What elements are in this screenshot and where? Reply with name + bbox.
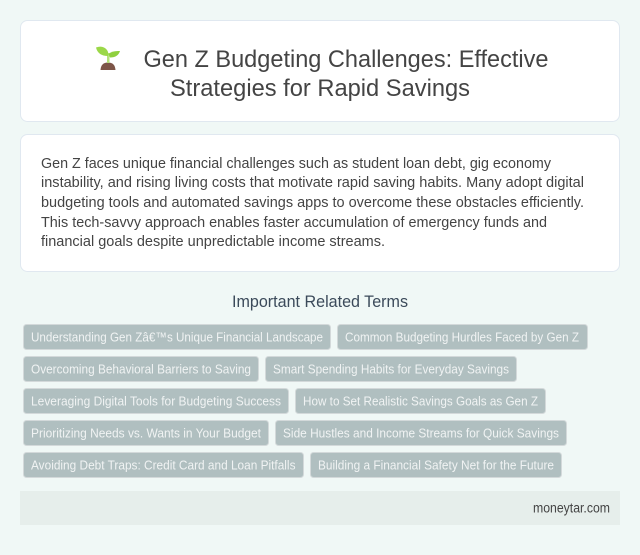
title: Gen Z Budgeting Challenges: Effective bbox=[144, 46, 548, 73]
tag: Overcoming Behavioral Barriers to Saving bbox=[31, 362, 251, 376]
tag bbox=[24, 356, 258, 382]
tag: Prioritizing Needs vs. Wants in Your Budget bbox=[31, 426, 261, 440]
tag bbox=[24, 452, 304, 478]
tag bbox=[338, 324, 588, 350]
text block: summary: budgeting tools and automated savings apps to overcome these obstacles efficiently. bbox=[41, 194, 584, 211]
text block: summary: This tech-savvy approach enables faster accumulation of emergency funds and bbox=[41, 214, 547, 231]
tag: Common Budgeting Hurdles Faced by Gen Z bbox=[345, 330, 579, 344]
tag: Understanding Gen Zâ€™s Unique Financial Landscape bbox=[31, 330, 323, 344]
tag: Leveraging Digital Tools for Budgeting Success bbox=[31, 394, 281, 408]
text block: summary: instability, and rising living costs that motivate rapid saving habits. Many adopt digital bbox=[41, 174, 584, 191]
tag bbox=[276, 420, 566, 446]
tag bbox=[310, 452, 562, 478]
tag: Smart Spending Habits for Everyday Savings bbox=[273, 362, 509, 376]
tag list bbox=[24, 324, 588, 478]
text block: summary: financial goals despite unpredictable income streams. bbox=[41, 233, 385, 250]
tag: Building a Financial Safety Net for the Future bbox=[318, 458, 554, 472]
tag bbox=[296, 388, 546, 414]
text block: summary: Gen Z faces unique financial challenges such as student loan debt, gig economy bbox=[41, 155, 551, 172]
tag: Avoiding Debt Traps: Credit Card and Loan Pitfalls bbox=[31, 458, 296, 472]
heading: related terms: Important Related Terms bbox=[232, 293, 408, 311]
tag bbox=[24, 388, 288, 414]
title: Strategies for Rapid Savings bbox=[170, 75, 470, 102]
panel: summary paragraph bbox=[20, 134, 620, 272]
footer bbox=[20, 491, 620, 525]
tag bbox=[24, 324, 330, 350]
icon: sprout bbox=[96, 47, 120, 70]
tag: Side Hustles and Income Streams for Quick Savings bbox=[283, 426, 559, 440]
panel: header card bbox=[20, 20, 620, 122]
tag: How to Set Realistic Savings Goals as Gen Z bbox=[303, 394, 538, 408]
footer: moneytar.com bbox=[533, 500, 610, 516]
text block: summary bbox=[41, 155, 584, 250]
title bbox=[144, 46, 548, 102]
tag bbox=[24, 420, 268, 446]
tag bbox=[266, 356, 516, 382]
